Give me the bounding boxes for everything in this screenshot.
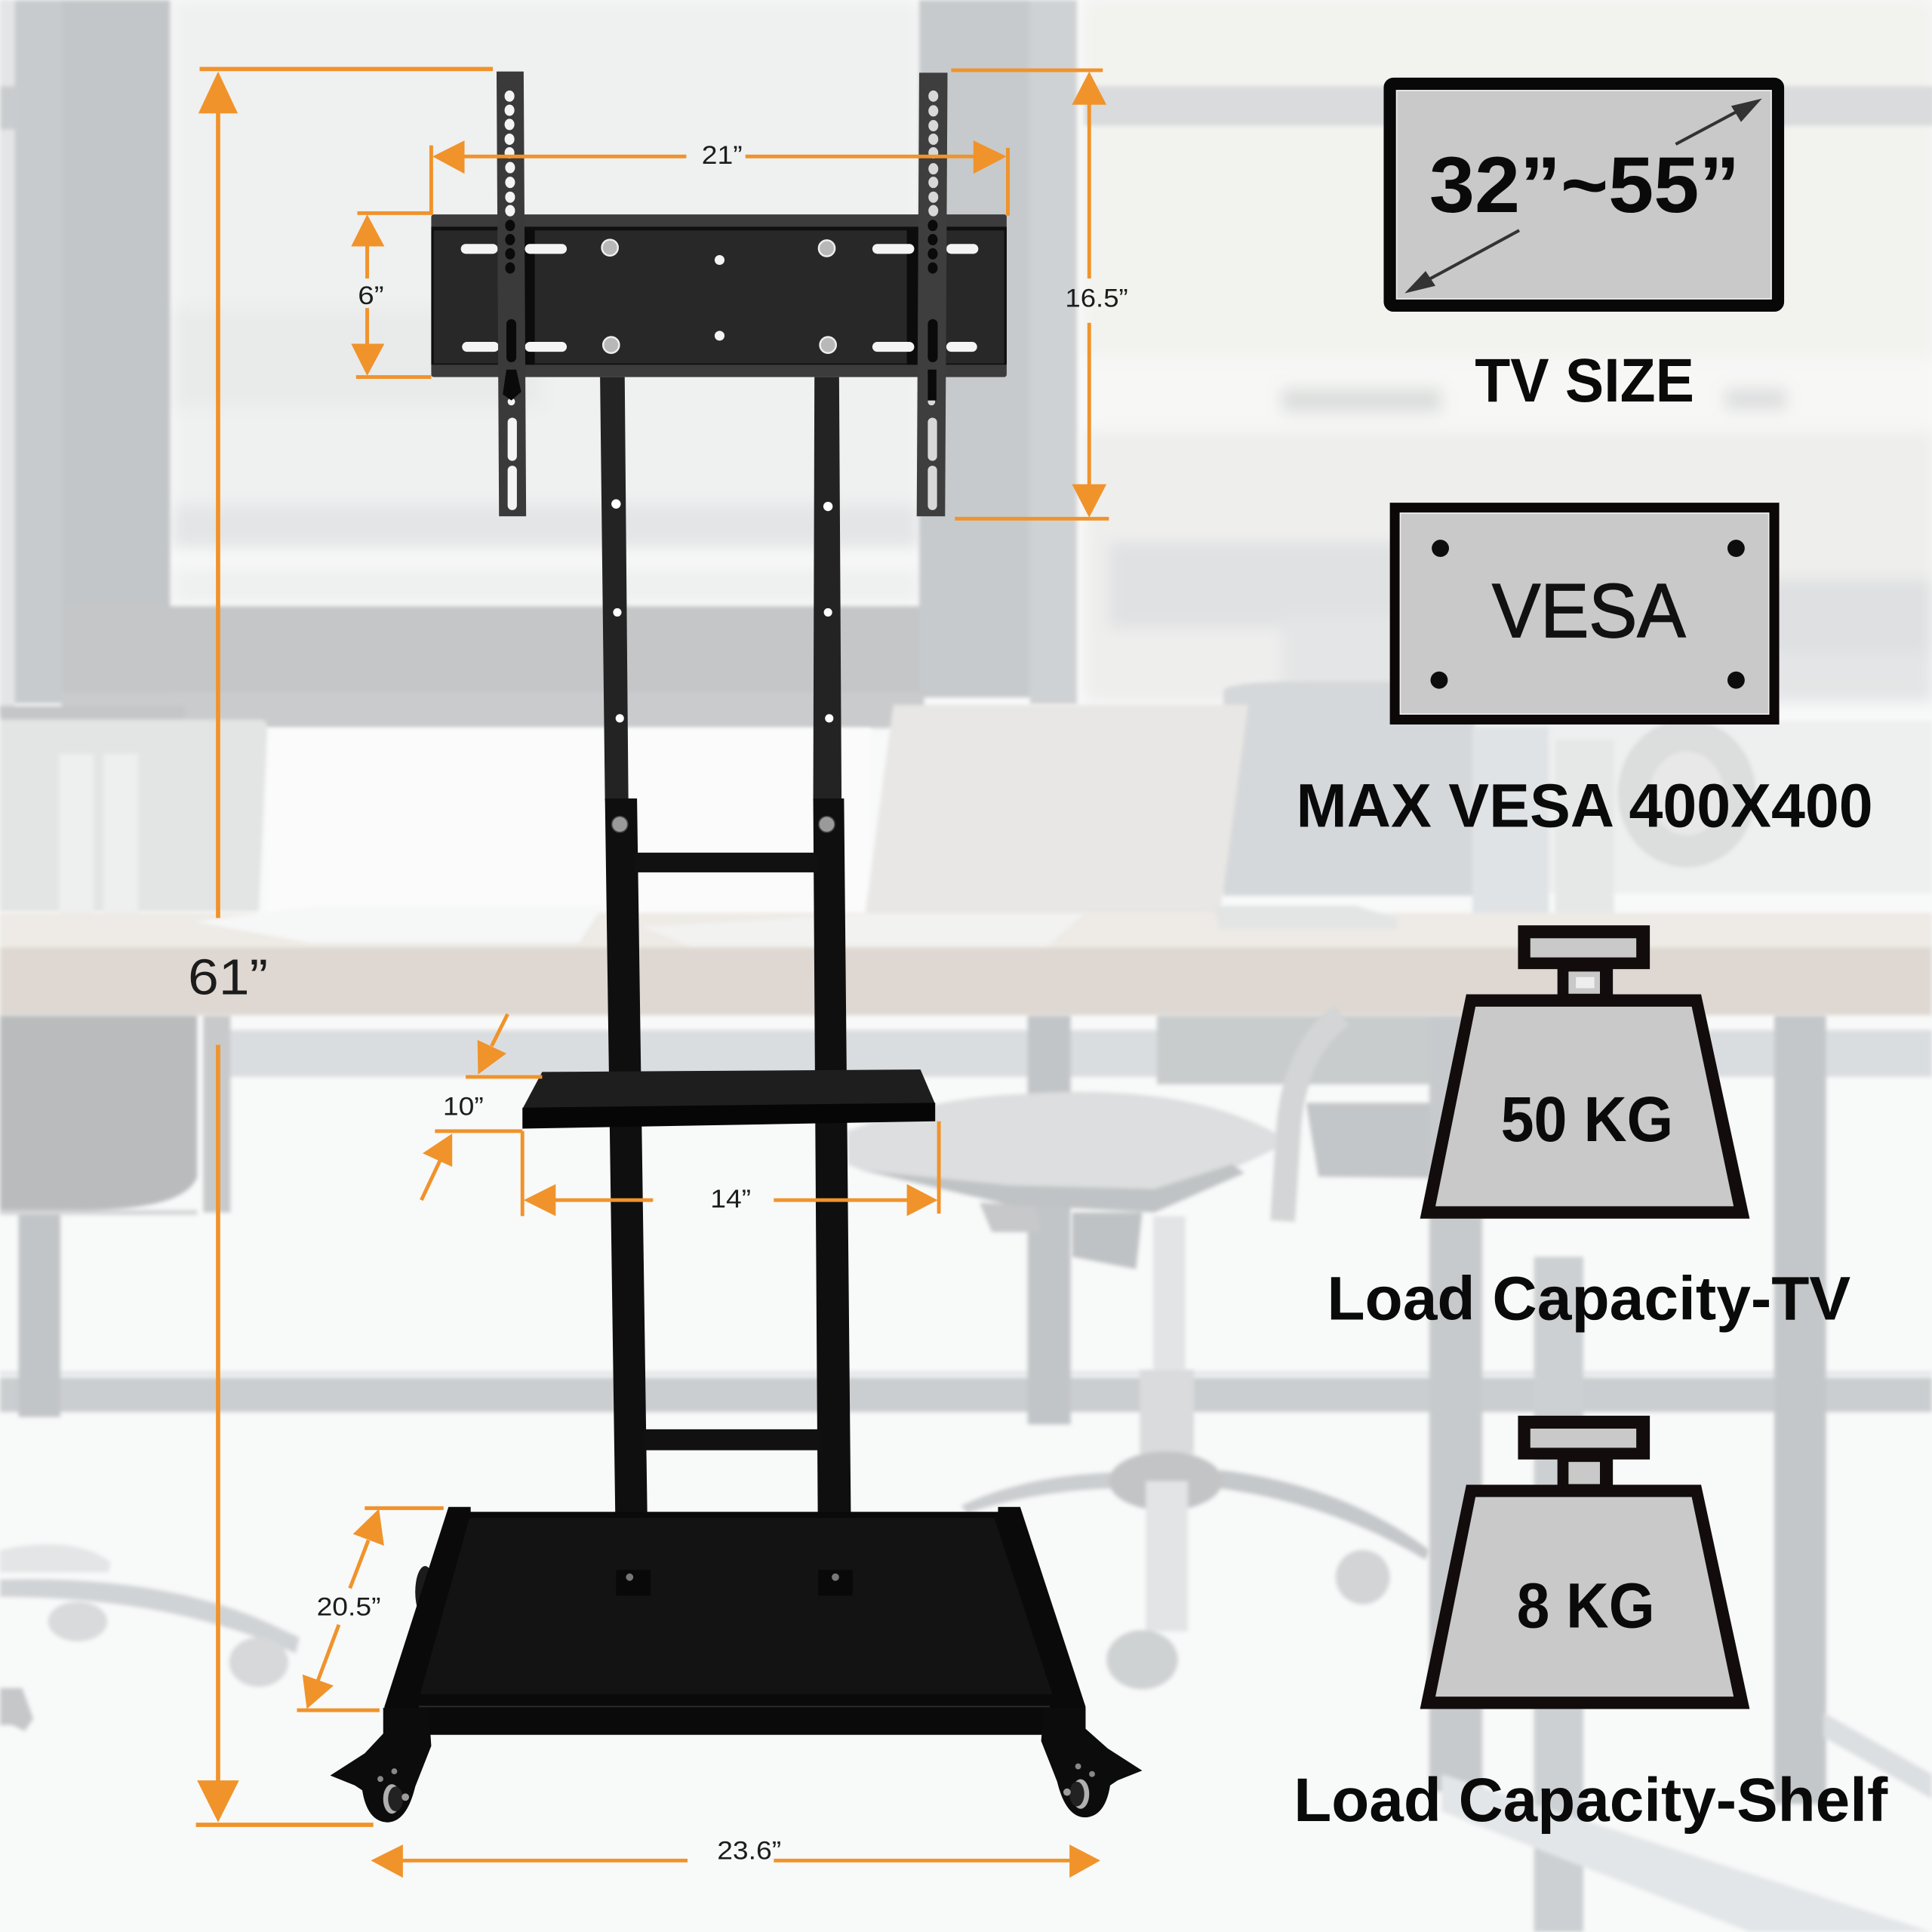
dimension: overall height 61: 61” [188,949,268,1006]
under-table window, legs and chairs [0,1015,1932,1932]
dimension: base width 23.6: 23.6” [717,1837,781,1866]
dimension: plate height 6: 6” [358,281,384,310]
left caster [331,1708,431,1823]
dimension: plate height 6 [351,214,431,377]
dimension: base depth 20.5 [297,1508,444,1710]
diagonal arrows [1404,99,1762,294]
icon: weight 8 KG [1420,1416,1749,1709]
dimension: plate width 21: 21” [702,141,743,170]
rear wheel [415,1566,435,1618]
dimension: base width 23.6 [371,1837,1100,1878]
shelf [522,1069,935,1129]
icon: weight 8 KG: 8 KG [1517,1570,1655,1641]
office chair [0,1015,1429,1731]
heading: load capacity shelf: Load Capacity-Shelf [1294,1766,1888,1835]
left post [600,377,648,1571]
heading: load capacity TV: Load Capacity-TV [1327,1265,1850,1334]
base platform [384,1507,1085,1735]
window frames [0,0,1932,728]
table [0,906,1932,1015]
icon: weight 50 KG [1420,925,1749,1219]
right caster [1041,1708,1142,1817]
post feet [616,1570,853,1595]
mounting plate [431,214,1007,377]
window view with blurred outdoor scenery [173,0,1932,703]
icon: TV size: 32”~55” [1429,141,1740,229]
heading: max VESA: MAX VESA 400X400 [1297,772,1873,841]
crossbars [635,853,820,1451]
dimension: plate width 21 [357,140,1008,216]
icon: TV size [1390,84,1778,306]
icon: VESA plate: VESA [1492,568,1686,654]
dimension: bracket height 16.5: 16.5” [1065,285,1128,313]
left bracket [497,72,526,516]
interior objects on table [0,681,1932,931]
dimension: base depth 20.5: 20.5” [317,1592,380,1621]
right bracket [917,72,948,516]
dimension: shelf depth 10: 10” [443,1093,484,1121]
icon: VESA plate [1395,508,1774,719]
dimension: shelf width 14 [522,1121,939,1216]
right post [814,377,851,1571]
dimension: shelf depth 10 [421,1014,542,1200]
dimension: bracket height 16.5 [951,70,1128,518]
heading: TV size: TV SIZE [1475,346,1694,415]
dimension: shelf width 14: 14” [710,1185,751,1214]
icon: weight 50 KG: 50 KG [1501,1083,1673,1155]
dimension: overall height 61 [188,69,493,1825]
TV stand [331,72,1142,1823]
